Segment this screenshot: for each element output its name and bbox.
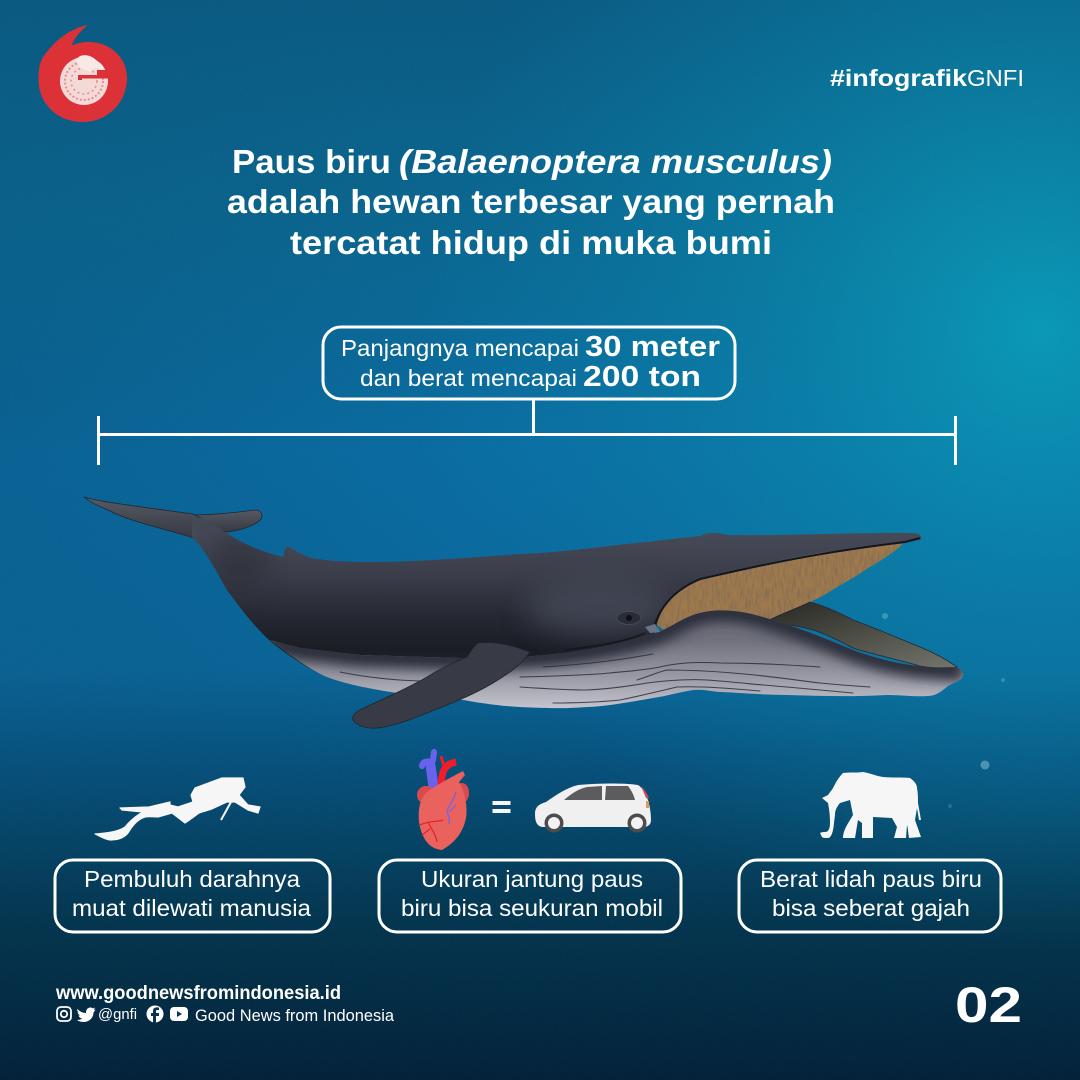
icon: car [535,784,651,832]
illustration: blue whale [84,497,980,728]
whale tail fluke [84,497,262,538]
icon: elephant [820,772,921,838]
whale body [192,518,922,708]
whale flipper [353,642,530,728]
footer: website and social: @gnfi [98,1006,137,1023]
icon: youtube [170,1007,188,1021]
title: Paus biru [232,143,391,180]
icon: equals sign [492,801,510,813]
page number: 02 [955,977,1022,1033]
icon: facebook [146,1006,164,1023]
hashtag: #infografik [830,65,967,91]
whale eye and mouth corner [565,612,660,650]
fact box: heart: biru bisa seukuran mobil [401,895,663,921]
whale jaw line [655,538,920,624]
whale belly and lower jaw [270,610,964,708]
title [227,143,835,261]
fact box: tongue [739,860,1001,932]
hashtag [830,65,1024,91]
callout: length and weight: dan berat mencapai [360,365,577,391]
title: adalah hewan terbesar yang pernah [227,183,835,220]
callout: length and weight [323,327,735,399]
fact box: blood vessel: muat dilewati manusia [72,895,311,921]
fact box: tongue: bisa seberat gajah [772,895,970,921]
fact box: heart [379,860,681,932]
logo: GNFI red mark [38,25,127,122]
icon: diver [95,778,260,840]
hashtag: GNFI [967,65,1024,91]
icon: heart [417,752,469,850]
footer: website and social: Good News from Indonesia [195,1006,395,1025]
whale ventral grooves [340,654,870,703]
title: tercatat hidup di muka bumi [290,224,772,261]
callout: length and weight: 200 ton [583,361,701,393]
icon: instagram [57,1007,71,1021]
callout: length and weight: Panjangnya mencapai [341,335,579,361]
fact box: tongue: Berat lidah paus biru [760,866,982,892]
whale mouth interior [765,602,957,669]
fact box: blood vessel: Pembuluh darahnya [84,866,300,892]
fact box: blood vessel [55,860,330,932]
callout: length and weight: 30 meter [585,331,720,363]
whale baleen [657,544,903,632]
title: (Balaenoptera musculus) [399,143,832,180]
icon: twitter [77,1008,96,1022]
length bracket [98,399,956,465]
footer: website and social: www.goodnewsfromindonesia.id [55,983,341,1004]
footer: website and social [55,983,395,1025]
fact box: heart: Ukuran jantung paus [421,866,643,892]
